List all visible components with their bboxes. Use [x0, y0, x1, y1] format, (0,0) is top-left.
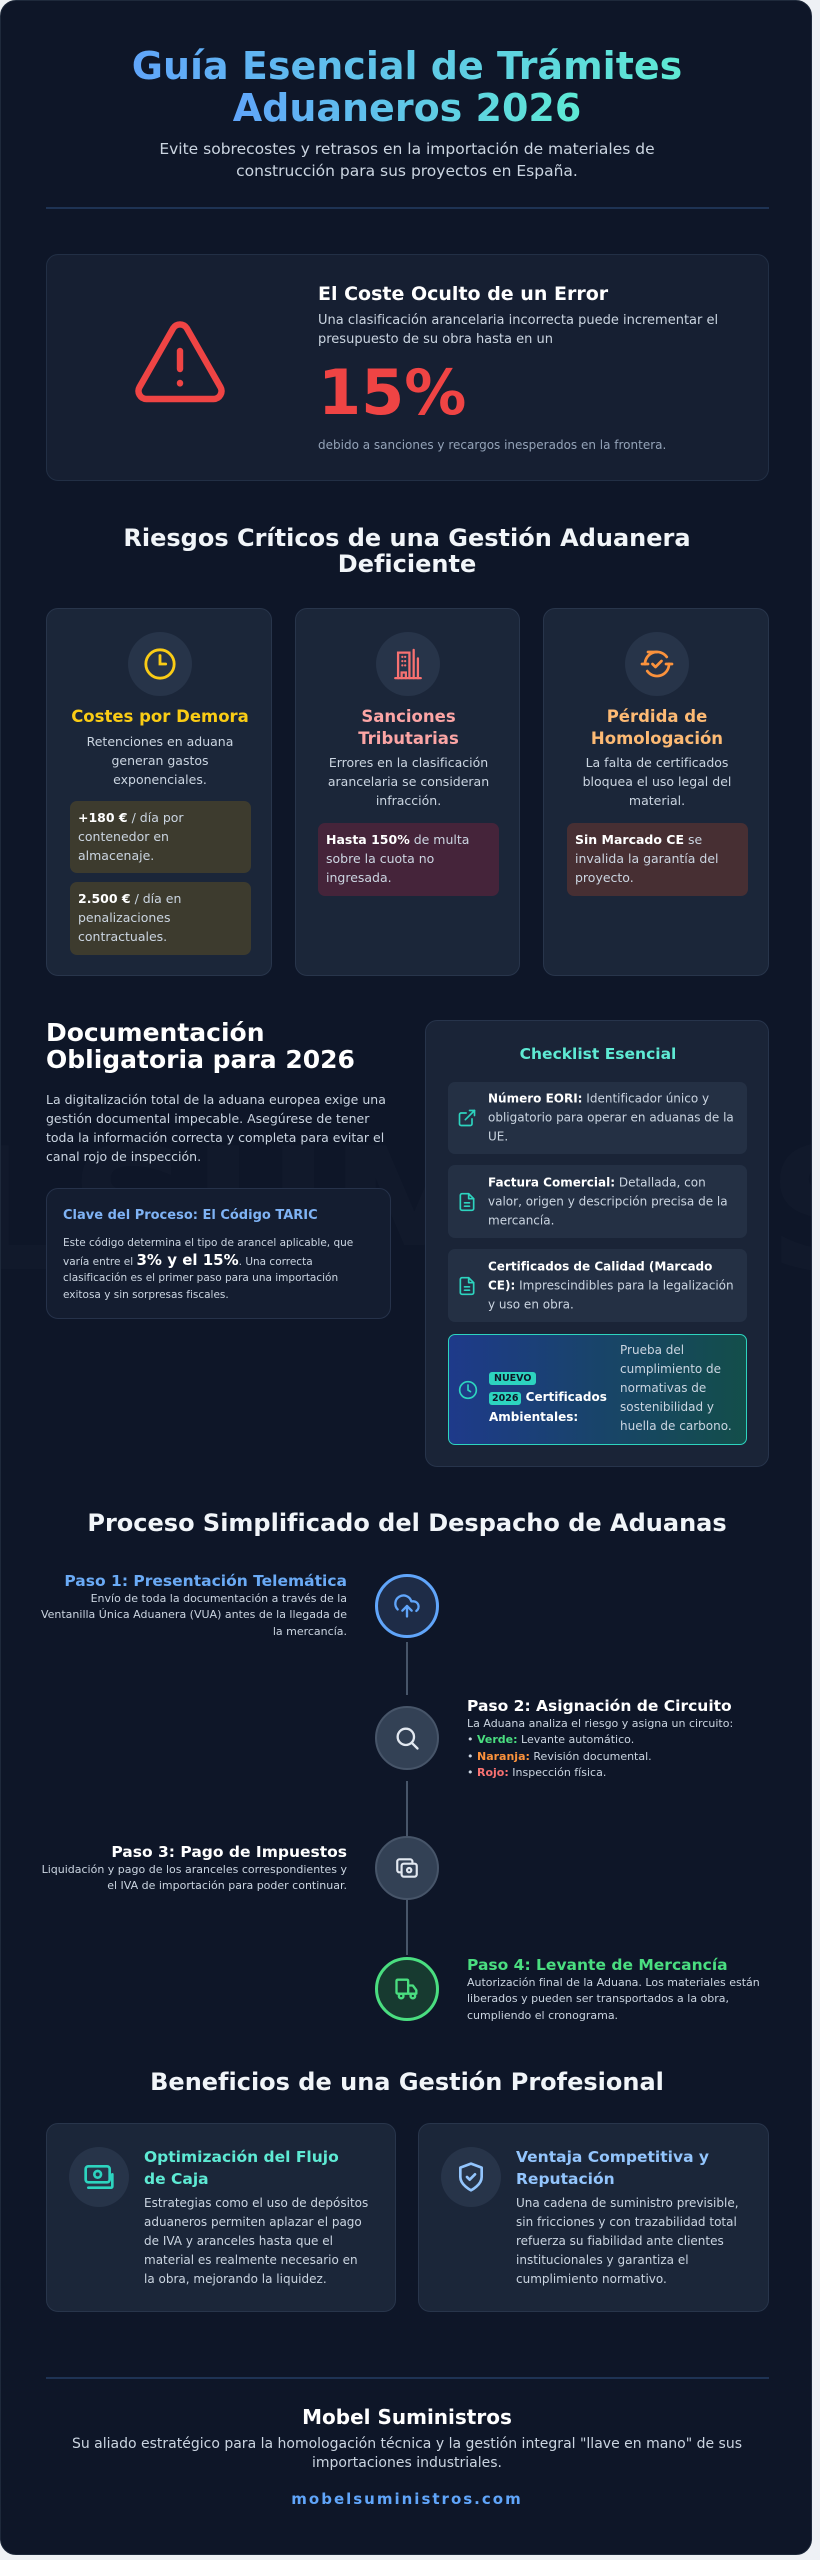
benefit desc: sin fricciones y con trazabilidad total: [516, 2215, 737, 2229]
text block: documentation intro: toda la información correcta y completa para evitar el: [46, 1130, 384, 1145]
step 2: • Rojo: Inspección física.: [467, 1766, 606, 1779]
item: certificados ambientales: [448, 1334, 747, 1445]
step 3: [42, 1843, 347, 1892]
title: Guía Esencial de Trámites: [132, 44, 682, 88]
step 4: liberados y pueden ser transportados a la obra,: [467, 1992, 729, 2005]
step 2: • Naranja: Revisión documental.: [467, 1750, 652, 1763]
step 4: Paso 4: Levante de Mercancía: [467, 1956, 728, 1974]
item: certificados calidad: Certificados de Calidad (Marcado CE): Imprescindibles para la legalización y uso en obra.: [488, 1259, 734, 1311]
risk desc: [328, 755, 489, 808]
stat box 2500: 2.500 € / día en: [78, 891, 181, 906]
risk title: Pérdida de: [607, 707, 707, 726]
risk desc: generan gastos: [111, 753, 209, 768]
footer tagline: [72, 2436, 742, 2471]
checklist title: Checklist Esencial: [520, 1045, 676, 1063]
callout: TARIC: [46, 1188, 391, 1319]
panel: risk homologation: [543, 608, 769, 976]
text block: documentation intro: [46, 1092, 386, 1164]
step 1: Ventanilla Única Aduanera (VUA) antes de la llegada de: [41, 1608, 347, 1621]
item: EORI: Número EORI: Identificador único y obligatorio para operar en aduanas de la UE.: [488, 1092, 734, 1144]
step 1: Envío de toda la documentación a través de la: [91, 1592, 347, 1605]
risk desc: [87, 734, 233, 787]
benefit desc: material es realmente necesario en: [144, 2253, 358, 2267]
item: EORI: [448, 1082, 747, 1154]
icon: shield: [441, 2147, 501, 2207]
text block: documentation intro: canal rojo de inspección.: [46, 1149, 201, 1164]
risk desc: exponenciales.: [113, 772, 207, 787]
text block: documentation intro: La digitalización total de la aduana europea exige una: [46, 1092, 386, 1107]
risk desc: [583, 755, 731, 808]
big stat 15%: 15%: [318, 356, 466, 429]
step 2: • Verde: Levante automático.: [467, 1733, 634, 1746]
step 4: Autorización final de la Aduana. Los materiales están: [467, 1976, 760, 1989]
risk desc: Errores en la clasificación: [329, 755, 488, 770]
step 2: Paso 2: Asignación de Circuito: [467, 1697, 732, 1715]
stat box 2500: penalizaciones: [78, 910, 170, 925]
item: certificados ambientales: Prueba del: [620, 1343, 684, 1357]
item: certificados ambientales: 2026 Certificados: [492, 1390, 607, 1404]
risk desc: material.: [629, 793, 685, 808]
item: certificados ambientales: sostenibilidad y: [620, 1400, 714, 1414]
risk title: Sanciones: [361, 707, 456, 726]
heading: risks: Deficiente: [338, 550, 476, 578]
risk title: Homologación: [591, 729, 723, 748]
benefit title: Ventaja Competitiva y: [516, 2148, 709, 2166]
icon: payment: [375, 1836, 439, 1900]
benefit desc: Una cadena de suministro previsible,: [516, 2196, 739, 2210]
callout: TARIC: Este código determina el tipo de arancel aplicable, que: [63, 1237, 353, 1249]
heading: documentation: [46, 1018, 355, 1074]
callout: TARIC: clasificación es el primer paso para una importación: [63, 1272, 338, 1284]
item: certificados ambientales: cumplimiento de: [620, 1362, 721, 1376]
stat box 180: almacenaje.: [78, 848, 154, 863]
heading: risks: [123, 524, 691, 578]
item: factura: Factura Comercial: Detallada, con valor, origen y descripción precisa de la mercancía.: [488, 1175, 728, 1227]
benefit desc: [516, 2196, 739, 2286]
item: factura: [448, 1165, 747, 1238]
icon: building chart: [376, 632, 440, 696]
benefit title: Reputación: [516, 2170, 615, 2188]
benefit title: [516, 2148, 709, 2188]
panel: benefit cash flow: [46, 2123, 396, 2312]
stat box 150%: Hasta 150% de multa: [326, 832, 469, 847]
stat box CE: proyecto.: [575, 870, 634, 885]
risk title: [591, 707, 723, 748]
icon: upload cloud: [375, 1574, 439, 1638]
item: certificados ambientales: NUEVO: [494, 1373, 531, 1384]
alert title: El Coste Oculto de un Error: [318, 283, 608, 305]
step 3: el IVA de importación para poder continuar.: [107, 1879, 347, 1892]
footer tagline: importaciones industriales.: [312, 2455, 502, 2471]
panel: hidden cost alert: [46, 254, 769, 481]
alert body: presupuesto de su obra hasta en un: [318, 332, 553, 347]
footer tagline: Su aliado estratégico para la homologación técnica y la gestión integral "llave en mano" de sus: [72, 2436, 742, 2452]
risk desc: bloquea el uso legal del: [583, 774, 731, 789]
benefit desc: la obra, mejorando la liquidez.: [144, 2272, 327, 2286]
panel: risk tax sanctions: [295, 608, 520, 976]
stat box 2500: [70, 882, 251, 955]
icon: clock: [128, 632, 192, 696]
subtitle: construcción para sus proyectos en España.: [236, 162, 578, 180]
stat box CE: [567, 823, 748, 896]
item: certificados ambientales: Ambientales:: [489, 1410, 578, 1424]
heading: documentation: Documentación: [46, 1018, 265, 1047]
heading: benefits: Beneficios de una Gestión Profesional: [150, 2068, 664, 2096]
stat box 150%: sobre la cuota no: [326, 851, 434, 866]
text block: documentation intro: gestión documental impecable. Asegúrese de tener: [46, 1111, 369, 1126]
alert footnote: debido a sanciones y recargos inesperados en la frontera.: [318, 438, 666, 452]
icon: warning triangle: [135, 321, 225, 402]
heading: documentation: Obligatoria para 2026: [46, 1045, 355, 1074]
step 3: Paso 3: Pago de Impuestos: [111, 1843, 347, 1861]
step 2: [467, 1697, 733, 1779]
benefit desc: aduaneros permiten aplazar el pago: [144, 2215, 362, 2229]
step 4: cumpliendo el cronograma.: [467, 2009, 618, 2022]
icon: refresh check: [625, 632, 689, 696]
icon: money: [69, 2147, 129, 2207]
footer: [72, 2405, 742, 2508]
risk desc: infracción.: [376, 793, 441, 808]
stat box 150%: ingresada.: [326, 870, 392, 885]
footer url: mobelsuministros.com: [291, 2490, 523, 2508]
step 3: Liquidación y pago de los aranceles correspondientes y: [42, 1863, 347, 1876]
callout: TARIC: varía entre el 3% y el 15%. Una correcta: [63, 1250, 313, 1268]
stat box 150%: [318, 823, 499, 896]
risk desc: Retenciones en aduana: [87, 734, 233, 749]
alert body: Una clasificación arancelaria incorrecta puede incrementar el: [318, 313, 718, 328]
benefit title: [144, 2148, 339, 2188]
benefit desc: de IVA y aranceles hasta que el: [144, 2234, 333, 2248]
risk desc: arancelaria se consideran: [328, 774, 489, 789]
stat box 180: +180 € / día por: [78, 810, 184, 825]
panel: benefit reputation: [418, 2123, 769, 2312]
panel: risk delay costs: [46, 608, 272, 976]
heading: process: Proceso Simplificado del Despacho de Aduanas: [87, 1509, 727, 1537]
step 1: Paso 1: Presentación Telemática: [64, 1572, 347, 1590]
stat box 180: contenedor en: [78, 829, 169, 844]
callout: TARIC: Clave del Proceso: El Código TARIC: [63, 1208, 318, 1223]
icon: search: [375, 1706, 439, 1770]
step 1: [41, 1572, 347, 1638]
subtitle: Evite sobrecostes y retrasos en la importación de materiales de: [159, 140, 655, 158]
benefit desc: refuerza su fiabilidad ante clientes: [516, 2234, 724, 2248]
step 2: La Aduana analiza el riesgo y asigna un circuito:: [467, 1717, 733, 1730]
footer brand: Mobel Suministros: [302, 2405, 512, 2429]
title: [132, 44, 682, 130]
risk title: [358, 707, 459, 748]
item: certificados ambientales: normativas de: [620, 1381, 706, 1395]
item: certificados calidad: [448, 1249, 747, 1322]
benefit desc: [144, 2196, 368, 2286]
title: Aduaneros 2026: [233, 86, 581, 130]
risk desc: La falta de certificados: [586, 755, 728, 770]
heading: risks: Riesgos Críticos de una Gestión Aduanera: [123, 524, 691, 552]
benefit desc: cumplimiento normativo.: [516, 2272, 667, 2286]
stat box CE: invalida la garantía del: [575, 851, 718, 866]
risk title: Costes por Demora: [71, 707, 249, 726]
icon: truck: [375, 1957, 439, 2021]
stat box 2500: contractuales.: [78, 929, 167, 944]
step 1: la mercancía.: [273, 1625, 347, 1638]
benefit title: Optimización del Flujo: [144, 2148, 339, 2166]
alert body: [318, 313, 718, 347]
risk title: Tributarias: [358, 729, 459, 748]
benefit desc: institucionales y garantiza el: [516, 2253, 689, 2267]
callout: TARIC: exitosa y sin sorpresas fiscales.: [63, 1288, 229, 1300]
stat box 180: [70, 801, 251, 873]
subtitle: [159, 140, 655, 180]
panel: checklist: [425, 1020, 769, 1467]
stat box CE: Sin Marcado CE se: [575, 832, 702, 847]
benefit title: de Caja: [144, 2170, 209, 2188]
item: certificados ambientales: huella de carbono.: [620, 1419, 732, 1433]
step 4: [467, 1956, 760, 2022]
benefit desc: Estrategias como el uso de depósitos: [144, 2196, 368, 2210]
